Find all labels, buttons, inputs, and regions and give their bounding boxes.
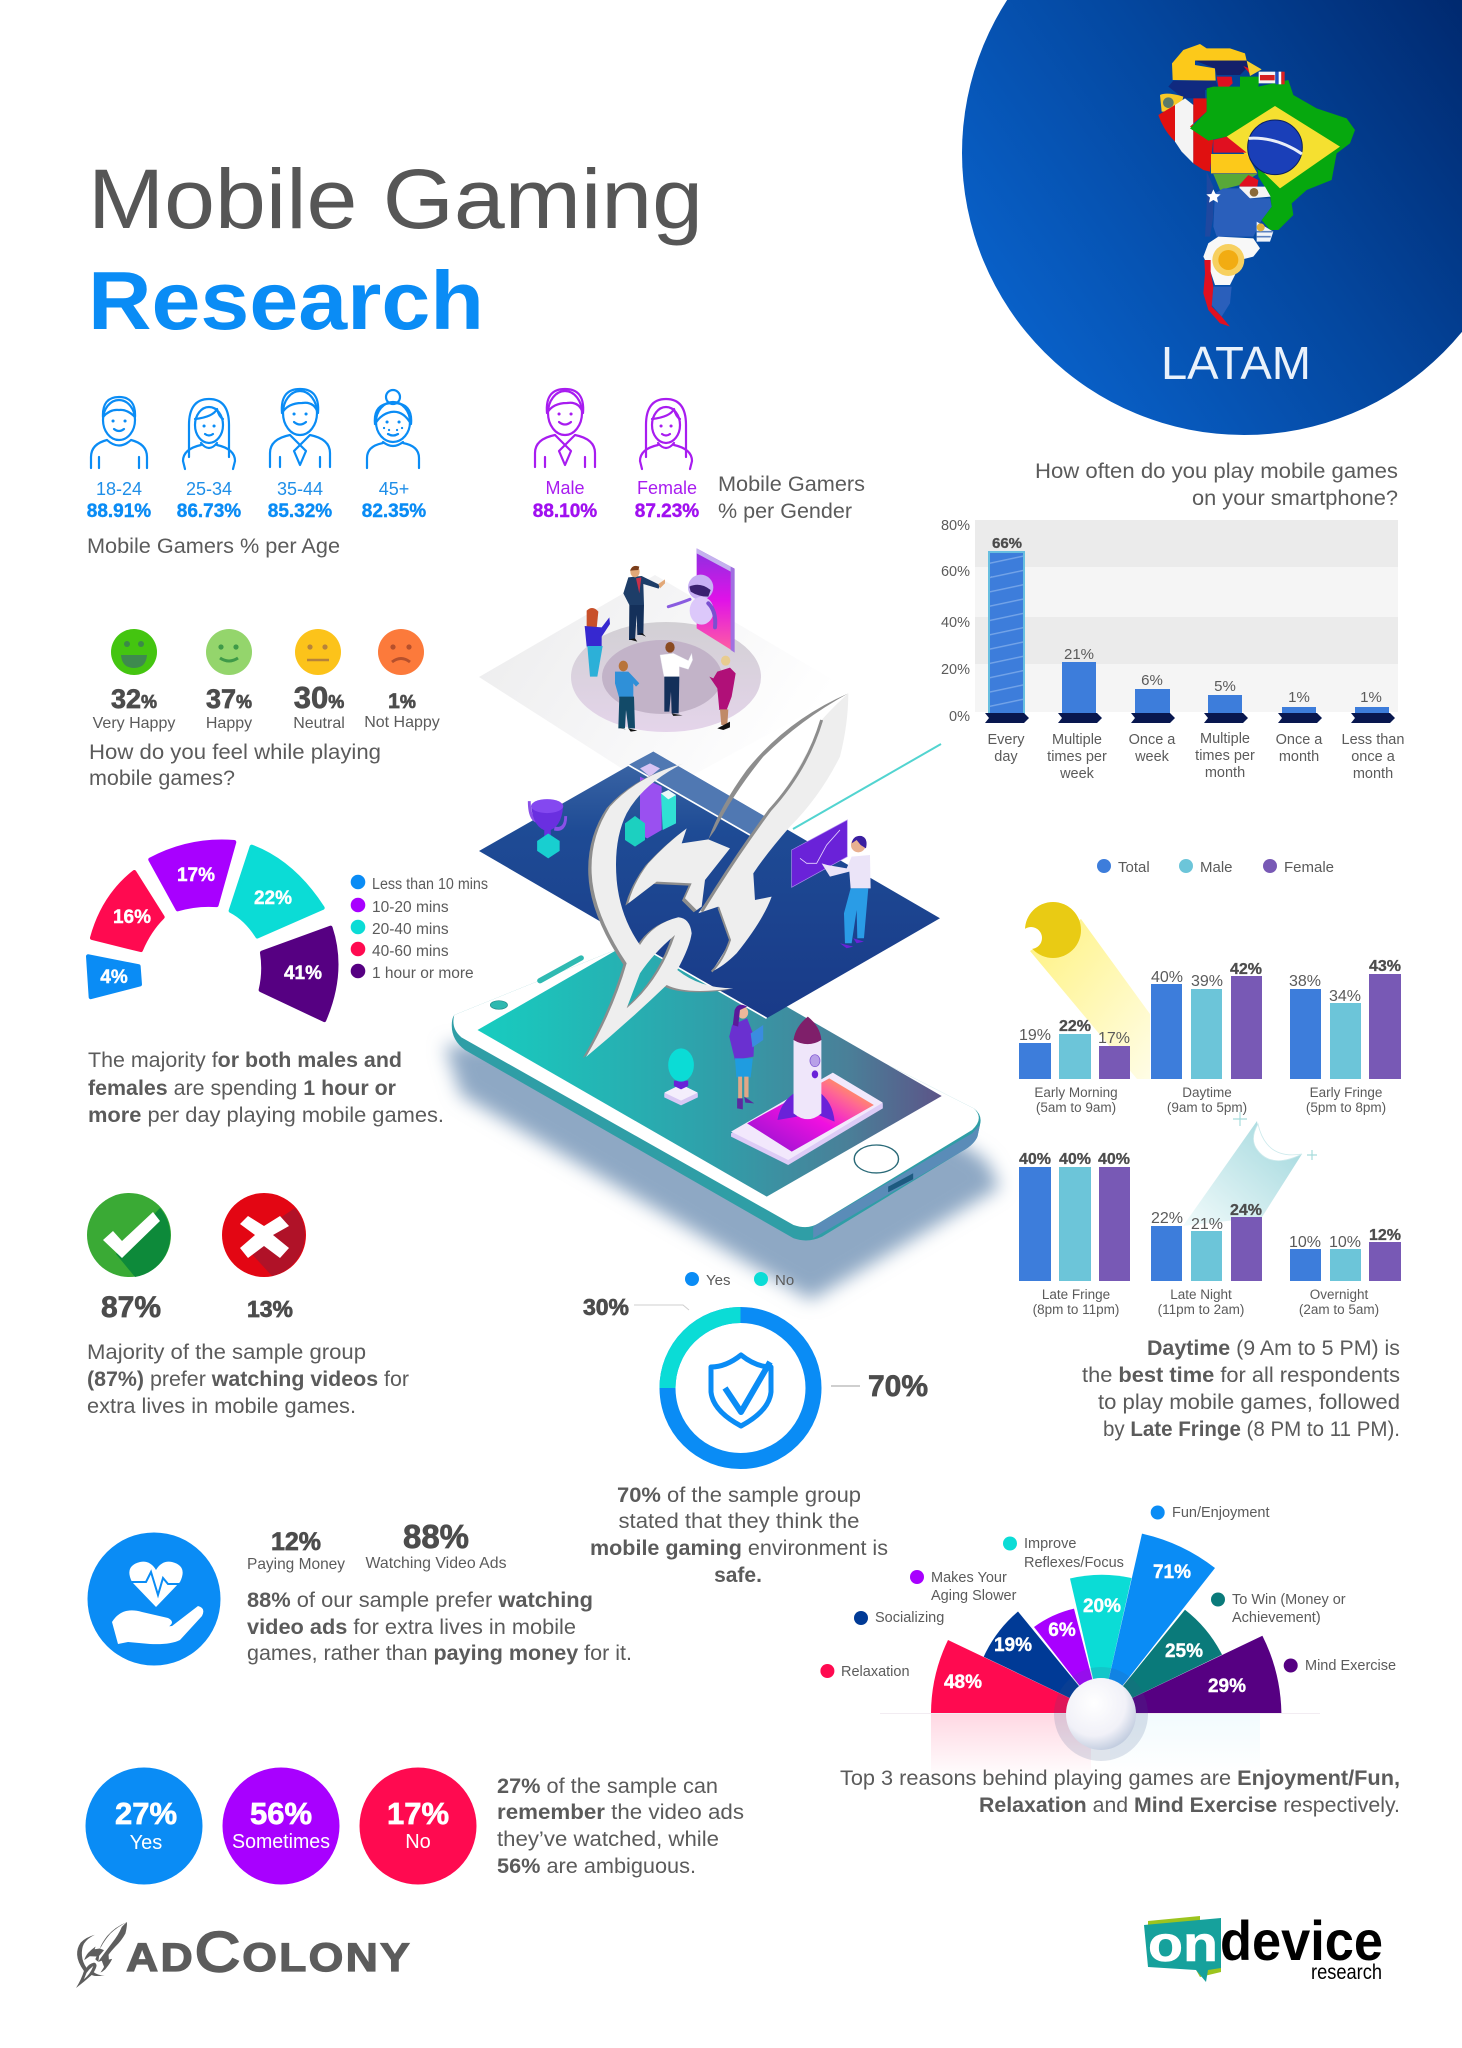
panel: age icons: Mobile Gamers % per Age	[87, 535, 340, 558]
segment values: 6%	[1048, 1620, 1076, 1641]
legend: Relaxation	[841, 1664, 910, 1680]
segment values: 22%	[254, 888, 292, 909]
category labels row 2: Late Night	[1170, 1287, 1232, 1302]
category labels row 2: Late Fringe	[1042, 1287, 1110, 1302]
text block: stated that they think the	[618, 1510, 860, 1533]
yes circle	[86, 1768, 202, 1884]
text block: more per day playing mobile games.	[88, 1104, 444, 1127]
panel: video ads: 12%	[271, 1528, 321, 1556]
values row 1: 40%	[1151, 969, 1183, 986]
mood percentages: 37%	[206, 684, 252, 714]
heading: How often do you play mobile games	[1035, 460, 1398, 483]
woman left	[585, 608, 610, 677]
segment values: 48%	[944, 1672, 982, 1693]
hull outline	[708, 693, 848, 839]
30% label: 30%	[583, 1294, 629, 1320]
y axis: 40%	[941, 615, 970, 631]
age labels: 25-34	[186, 479, 232, 499]
age percentages: 82.35%	[362, 501, 426, 522]
text block	[88, 1049, 444, 1127]
text block: Relaxation and Mind Exercise respectively.	[979, 1794, 1400, 1817]
mood percentages: 30%	[294, 680, 344, 715]
y axis: 60%	[941, 564, 970, 580]
mood percentages	[111, 680, 416, 715]
text block: females are spending 1 hour or	[88, 1077, 396, 1100]
icon: moon beam	[1183, 1112, 1317, 1226]
mood labels: Very Happy	[93, 715, 175, 732]
figures on top platform	[585, 548, 736, 732]
trophy	[529, 799, 566, 858]
segment values: 19%	[994, 1635, 1032, 1656]
sometimes circle: Sometimes	[232, 1831, 330, 1853]
text block: to play mobile games, followed	[1098, 1391, 1400, 1414]
category labels row 2: Overnight	[1310, 1287, 1369, 1302]
category labels row 1: (9am to 5pm)	[1167, 1100, 1247, 1115]
x labels: week	[1134, 749, 1170, 765]
text block	[590, 1484, 888, 1587]
legend: 10-20 mins	[372, 899, 449, 916]
yes circle: Yes	[130, 1832, 162, 1854]
legend: No	[775, 1272, 794, 1289]
panel: video ads: Paying Money	[247, 1556, 345, 1573]
age labels: 35-44	[277, 479, 323, 499]
icon: not happy face	[378, 629, 424, 675]
panel: safety donut	[583, 1272, 928, 1587]
values row 1: 34%	[1329, 988, 1361, 1005]
values row 1: 39%	[1191, 973, 1223, 990]
text block: Majority of the sample group	[87, 1341, 366, 1364]
sometimes circle: 56%	[250, 1796, 312, 1831]
values row 1: 42%	[1230, 961, 1262, 978]
panel: time of day chart	[1019, 859, 1401, 1441]
text block: video ads for extra lives in mobile	[247, 1616, 576, 1639]
panel: LATAM circle: LATAM	[1161, 337, 1311, 389]
values row 2: 10%	[1329, 1234, 1361, 1251]
icon: cross	[222, 1193, 306, 1277]
values row 2: 40%	[1019, 1151, 1051, 1168]
woman in magenta	[709, 656, 736, 730]
illustration: isometric phone and layers	[445, 548, 1000, 1300]
panel: LATAM circle	[962, 0, 1462, 435]
legend: 20-40 mins	[372, 921, 449, 938]
age percentages: 85.32%	[268, 501, 332, 522]
segment values: 29%	[1208, 1676, 1246, 1697]
x labels: Once a	[1276, 732, 1323, 748]
text block: remember the video ads	[497, 1801, 744, 1824]
panel: gender	[533, 389, 865, 523]
woman with tablet	[729, 1005, 763, 1109]
mood labels: Not Happy	[364, 714, 440, 731]
category labels row 1: (5am to 9am)	[1036, 1100, 1116, 1115]
left wing	[625, 831, 727, 912]
x labels: Less than	[1342, 732, 1404, 748]
panel: how do you feel: How do you feel while playing	[89, 741, 381, 764]
values row 2: 22%	[1151, 1210, 1183, 1227]
bar values: 5%	[1214, 678, 1236, 695]
icon: 25-34	[183, 399, 235, 469]
x labels: month	[1353, 766, 1393, 782]
legend	[351, 875, 488, 982]
phone body	[452, 929, 981, 1240]
text block: 56% are ambiguous.	[497, 1855, 696, 1878]
heading: on your smartphone?	[1192, 487, 1398, 510]
category labels row 2	[1033, 1287, 1379, 1317]
x labels: times per	[1195, 748, 1255, 764]
no circle	[360, 1768, 476, 1884]
values row 2: 12%	[1369, 1227, 1401, 1244]
y axis: 80%	[941, 518, 970, 534]
x labels: Multiple	[1200, 731, 1250, 747]
text block	[497, 1775, 744, 1878]
panel: gender: % per Gender	[718, 500, 852, 523]
values row 1	[1019, 958, 1401, 1047]
icon: happy face	[206, 629, 252, 675]
text block	[1082, 1337, 1400, 1441]
panel: gender: Female	[637, 478, 697, 498]
panel: gender: 88.10%	[533, 501, 597, 522]
logo: On Device Research: on	[1148, 1916, 1218, 1972]
bar values: 1%	[1288, 689, 1310, 706]
values row 2: 21%	[1191, 1216, 1223, 1233]
heading	[1035, 460, 1398, 510]
x labels: week	[1059, 766, 1095, 782]
values row 2: 10%	[1289, 1234, 1321, 1251]
lamp	[664, 1048, 698, 1105]
panel: video ads: Watching Video Ads	[366, 1555, 506, 1572]
presenter at chart board	[792, 820, 871, 948]
panel: time-spent chart	[88, 842, 488, 1127]
text block	[87, 1341, 409, 1418]
mood percentages: 32%	[111, 684, 157, 714]
legend: Reflexes/Focus	[1024, 1555, 1124, 1571]
legend: Total	[1118, 859, 1150, 876]
man in blue hoodie	[615, 661, 639, 732]
legend	[820, 1505, 1396, 1680]
segment values	[100, 865, 322, 988]
bars row 2	[1019, 1167, 1401, 1281]
no circle: 17%	[387, 1796, 449, 1831]
icon: rocket	[76, 1922, 127, 1988]
yes circle: 27%	[115, 1796, 177, 1831]
legend: Yes	[706, 1272, 730, 1289]
icon: shield	[711, 1355, 771, 1426]
logo: AdColony: ADCOLONY	[126, 1920, 412, 1983]
y axis: 20%	[941, 662, 970, 678]
segment values: 16%	[113, 907, 151, 928]
panel: extra lives check and cross	[87, 1193, 409, 1418]
title	[88, 152, 703, 347]
bar values: 66%	[992, 535, 1022, 552]
legend: Mind Exercise	[1305, 1658, 1396, 1674]
segmented arc chart	[88, 842, 337, 1020]
icon: female	[640, 399, 692, 469]
text block: (87%) prefer watching videos for	[87, 1368, 409, 1391]
x labels: Every	[987, 732, 1025, 748]
legend: Makes Your	[931, 1570, 1007, 1586]
bar cubes	[625, 763, 676, 847]
top platform	[479, 575, 850, 793]
category labels row 1: (5pm to 8pm)	[1306, 1100, 1386, 1115]
icon: 45+	[367, 390, 419, 468]
logo: On Device Research	[1144, 1909, 1383, 1984]
legend: Aging Slower	[931, 1588, 1017, 1604]
text block: they’ve watched, while	[497, 1828, 719, 1851]
category labels row 1: Early Fringe	[1310, 1085, 1382, 1100]
bars	[985, 552, 1395, 723]
age labels	[96, 479, 409, 499]
values row 1: 22%	[1059, 1018, 1091, 1035]
sometimes circle	[222, 1768, 340, 1884]
panel: gender: Mobile Gamers	[718, 473, 865, 496]
age percentages: 86.73%	[177, 501, 241, 522]
icon: sun beam	[1020, 902, 1150, 1079]
legend: Fun/Enjoyment	[1172, 1505, 1270, 1521]
30% label	[583, 1294, 689, 1320]
text block	[247, 1589, 632, 1665]
swoosh	[583, 763, 733, 1058]
legend: Achievement)	[1232, 1610, 1321, 1626]
mood percentages: 1%	[388, 690, 416, 713]
values row 2: 40%	[1059, 1151, 1091, 1168]
bars row 1	[1019, 974, 1401, 1079]
legend: 1 hour or more	[372, 965, 474, 982]
logo: On Device Research: device	[1220, 1909, 1383, 1972]
man in white shirt	[660, 642, 693, 716]
big rocket logo	[583, 693, 848, 1058]
panel: remember ads	[86, 1768, 744, 1884]
icon: neutral face	[295, 629, 341, 675]
category labels row 1	[1034, 1085, 1386, 1115]
age labels: 18-24	[96, 479, 142, 499]
reflection	[880, 1713, 1320, 1779]
small phone and rocket	[731, 1017, 883, 1165]
home button	[854, 1145, 899, 1173]
legend: Female	[1284, 859, 1334, 876]
legend: Male	[1200, 859, 1233, 876]
items on phone screen	[664, 1005, 883, 1165]
text block: The majority for both males and	[88, 1049, 402, 1072]
bar values: 21%	[1064, 646, 1094, 663]
title: Research	[88, 254, 484, 347]
panel: extra lives check and cross: 13%	[247, 1296, 293, 1322]
icon: heart in hand	[88, 1532, 220, 1666]
text block: Top 3 reasons behind playing games are Enjoyment/Fun,	[840, 1767, 1400, 1790]
panel: video ads	[88, 1518, 632, 1666]
rocket body	[698, 693, 848, 972]
x labels: month	[1279, 749, 1319, 765]
text block: safe.	[714, 1564, 762, 1587]
segment values: 17%	[177, 865, 215, 886]
center sphere	[1054, 1667, 1148, 1761]
age percentages	[87, 501, 426, 522]
bar values: 6%	[1141, 672, 1163, 689]
x labels: once a	[1351, 749, 1396, 765]
values row 2	[1019, 1151, 1401, 1251]
text block: by Late Fringe (8 PM to 11 PM).	[1103, 1418, 1400, 1441]
text block: the best time for all respondents	[1082, 1364, 1400, 1387]
values row 2: 40%	[1098, 1151, 1130, 1168]
text block	[840, 1767, 1400, 1817]
panel: gender: Male	[545, 478, 585, 498]
icon: male	[535, 389, 595, 467]
y axis: 0%	[949, 709, 970, 725]
segment values: 25%	[1165, 1641, 1203, 1662]
values row 1: 17%	[1098, 1030, 1130, 1047]
segment values: 41%	[284, 963, 322, 984]
text block: 27% of the sample can	[497, 1775, 718, 1798]
bar values	[992, 535, 1382, 706]
bar values: 1%	[1360, 689, 1382, 706]
segment values: 71%	[1153, 1562, 1191, 1583]
legend	[685, 1272, 794, 1289]
phone with robot	[668, 548, 735, 653]
panel: how do you feel	[89, 629, 440, 790]
teal connector line	[793, 744, 941, 829]
mood labels: Neutral	[293, 715, 345, 732]
mood labels	[93, 714, 440, 732]
values row 1: 38%	[1289, 973, 1321, 990]
x labels: month	[1205, 765, 1245, 781]
values row 2: 24%	[1230, 1202, 1262, 1219]
icon: very happy face	[111, 629, 157, 675]
presenter man	[623, 566, 665, 642]
x labels: Multiple	[1052, 732, 1102, 748]
icon: 35-44	[270, 389, 330, 467]
values row 1: 43%	[1369, 958, 1401, 975]
panel: age icons	[87, 389, 426, 558]
category labels row 1: Daytime	[1182, 1085, 1232, 1100]
legend: To Win (Money or	[1232, 1592, 1346, 1608]
panel: how often bar chart	[941, 460, 1404, 782]
panel: extra lives check and cross: 87%	[101, 1291, 161, 1324]
y axis	[941, 518, 970, 725]
x labels	[987, 731, 1404, 782]
legend: Less than 10 mins	[372, 876, 488, 893]
fan segments	[931, 1534, 1281, 1713]
age labels: 45+	[379, 479, 409, 499]
70% label	[831, 1370, 928, 1403]
x labels: times per	[1047, 749, 1107, 765]
no circle: No	[405, 1831, 431, 1853]
panel: reasons fan chart	[820, 1505, 1400, 1817]
values row 1: 19%	[1019, 1027, 1051, 1044]
donut chart	[668, 1315, 814, 1461]
title: Mobile Gaming	[88, 152, 703, 246]
category labels row 2: (8pm to 11pm)	[1033, 1302, 1119, 1317]
text block: extra lives in mobile games.	[87, 1395, 356, 1418]
legend	[1097, 859, 1334, 876]
category labels row 2: (2am to 5am)	[1299, 1302, 1379, 1317]
icon: check	[87, 1193, 171, 1277]
panel: video ads: 88%	[403, 1518, 469, 1555]
phone shadow	[445, 1040, 1000, 1300]
legend: Improve	[1024, 1536, 1076, 1552]
text block: 70% of the sample group	[617, 1484, 861, 1507]
legend: 40-60 mins	[372, 943, 449, 960]
logo: On Device Research: research	[1311, 1961, 1382, 1984]
text block: Daytime (9 Am to 5 PM) is	[1147, 1337, 1400, 1360]
panel: how do you feel: mobile games?	[89, 767, 235, 790]
age percentages: 88.91%	[87, 501, 151, 522]
map: South America flags	[1158, 44, 1355, 327]
category labels row 1: Early Morning	[1034, 1085, 1118, 1100]
category labels row 2: (11pm to 2am)	[1158, 1302, 1244, 1317]
text block: 88% of our sample prefer watching	[247, 1589, 593, 1612]
segment values: 20%	[1083, 1596, 1121, 1617]
icon: 18-24	[91, 397, 147, 468]
segment values: 4%	[100, 967, 128, 988]
text block: mobile gaming environment is	[590, 1537, 888, 1560]
x labels: Once a	[1129, 732, 1176, 748]
mood labels: Happy	[206, 715, 252, 732]
legend: Socializing	[875, 1610, 944, 1626]
middle platform	[479, 752, 940, 1018]
text block: games, rather than paying money for it.	[247, 1642, 632, 1665]
x labels: day	[994, 749, 1018, 765]
segment values	[944, 1562, 1246, 1697]
70% label: 70%	[868, 1370, 928, 1403]
panel: gender: 87.23%	[635, 501, 699, 522]
